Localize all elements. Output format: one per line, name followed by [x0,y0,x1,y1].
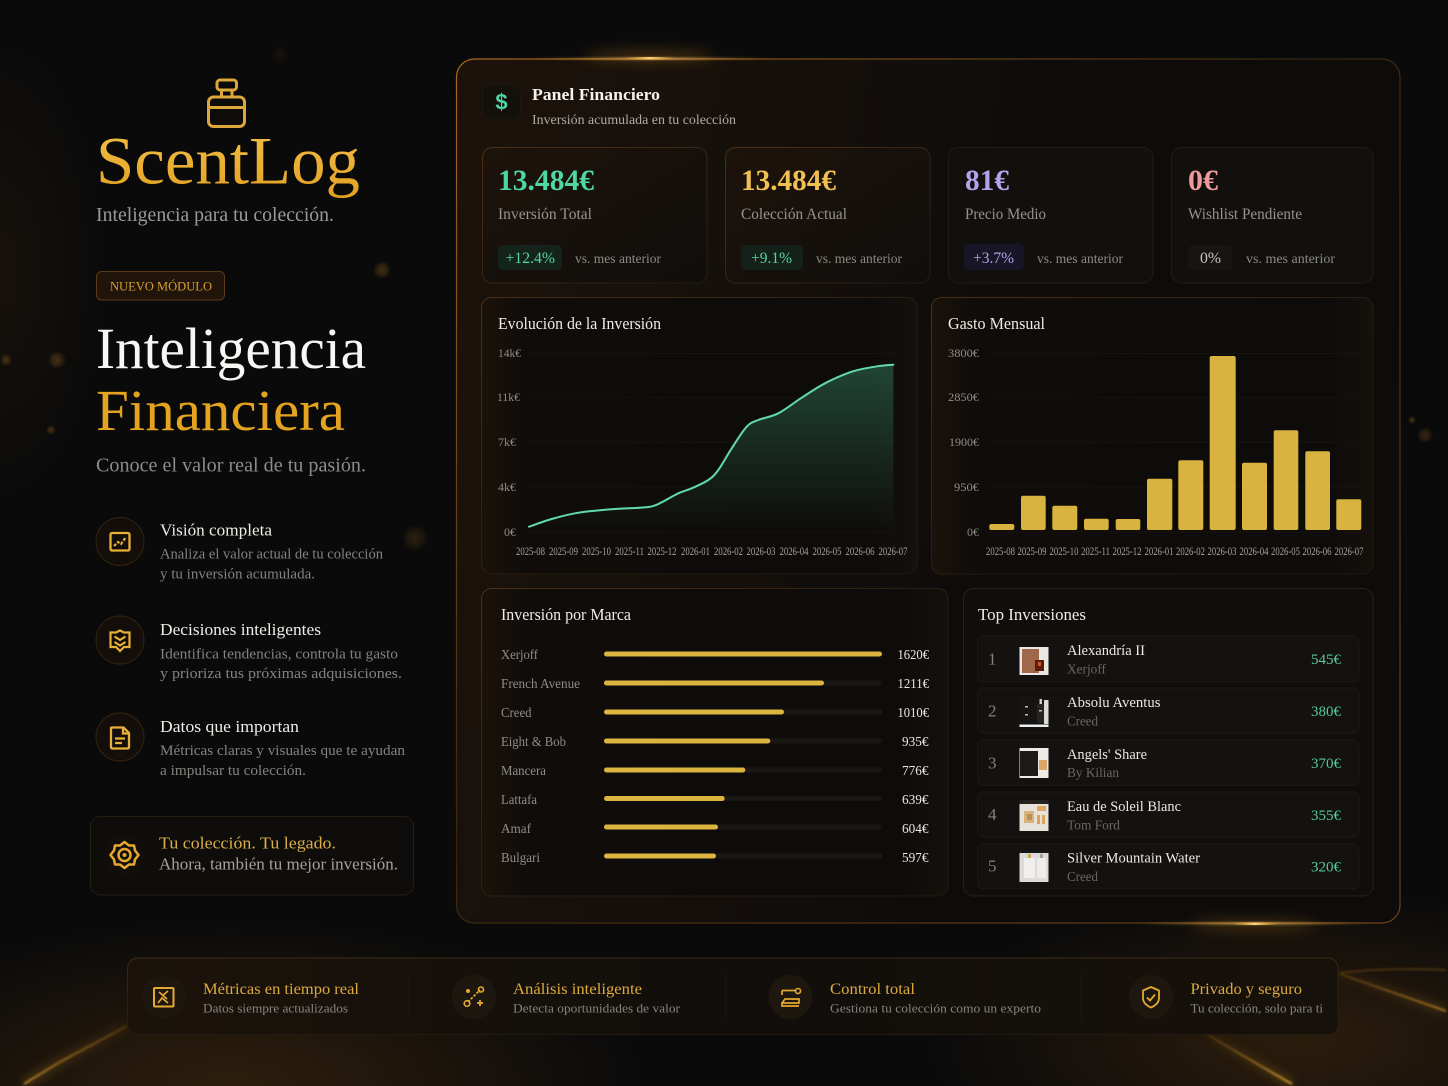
row: Alexandria II: 1 [988,650,996,668]
thumbnail: Angels' Share [1020,745,1048,778]
subheading: Conoce el valor real de tu pasión. [96,454,366,476]
horizontal bar list: 639€ [902,793,928,808]
footer item: control: Control total [830,981,916,998]
icon: metric square [142,976,186,1018]
row: Eau de Soleil Blanc [978,792,1359,838]
row: Alexandria II: 545€ [1311,652,1342,668]
horizontal bar list: 1010€ [898,706,929,721]
row: Angels' Share [978,740,1359,786]
feature: Vision completa: y tu inversión acumulada. [160,567,315,583]
panel: inversion por marca [482,588,948,896]
title: ScentLog: ScentLog [96,122,360,198]
kpi card: wishlist pendiente: 0€ [1188,164,1218,197]
row: Absolu Aventus: 380€ [1311,704,1342,720]
bar chart [948,346,1364,558]
horizontal bar list: Amaf [501,822,531,837]
thumbnail: Silver Mountain Water [1020,850,1048,882]
kpi card: inversion total: Inversión Total [498,206,592,223]
line chart: 14k€ [498,346,521,360]
line chart: 2026-01 [681,546,710,558]
horizontal bar list: 1620€ [898,648,929,663]
row: Alexandria II: Xerjoff [1067,662,1106,676]
footer item: analisis: Análisis inteligente [513,981,642,998]
feature: Decisiones inteligentes: Decisiones inteligentes [160,620,321,639]
row: Absolu Aventus [978,688,1359,734]
line chart: 2025-10 [582,546,611,558]
chart panel: evolucion de la inversion [482,298,917,574]
horizontal bar list: 776€ [902,764,928,779]
thumbnail: Eau de Soleil Blanc [1020,800,1048,831]
kpi card: precio medio [948,148,1153,283]
tagline: Inteligencia para tu colección. [96,205,334,226]
horizontal bar list: Mancera [501,764,547,779]
icon: gear [104,834,146,876]
feature: Decisiones inteligentes [96,616,402,682]
kpi card: inversion total: +12.4% [506,250,555,267]
kpi card: precio medio: vs. mes anterior [1037,251,1123,266]
row: Eau de Soleil Blanc: 355€ [1311,808,1342,824]
bar chart: 2026-05 [1271,546,1300,558]
line chart: 2025-09 [549,546,578,558]
horizontal bar list: Xerjoff [501,648,538,663]
footer item: privado: Privado y seguro [1190,981,1302,998]
horizontal bar list: Eight & Bob [501,735,566,750]
kpi card: coleccion actual: vs. mes anterior [816,251,902,266]
horizontal bar list: Creed [501,706,532,721]
kpi card: wishlist pendiente: Wishlist Pendiente [1188,206,1302,223]
kpi card: wishlist pendiente [1172,148,1373,283]
kpi card: coleccion actual: +9.1% [751,250,792,267]
bar chart: 2026-06 [1302,546,1332,558]
panel header [482,84,736,128]
line chart: 2026-02 [714,546,743,558]
feature: Decisiones inteligentes: y prioriza tus próximas adquisiciones. [160,666,402,682]
bar chart: 2026-07 [1334,546,1364,558]
row: Absolu Aventus: Creed [1067,714,1098,728]
row: Alexandria II: Alexandría II [1067,643,1145,659]
bar chart: 2026-03 [1208,546,1237,558]
icon: dollar [482,84,520,120]
line chart: 2026-07 [878,546,908,558]
bar chart: 3800€ [948,346,979,360]
horizontal bar list: French Avenue [501,677,580,692]
bar chart: 2850€ [948,390,979,404]
line chart: 7k€ [498,435,516,449]
line chart: 2026-04 [780,546,809,558]
feature: Datos que importan [96,713,406,779]
horizontal bar list: Bulgari [501,851,540,866]
feature: Vision completa: Analiza el valor actual de tu colección [160,547,384,563]
panel: panel financiero [456,52,1400,929]
badge: nuevo modulo [96,272,224,300]
footer item: metricas: Métricas en tiempo real [203,981,360,998]
row: Silver Mountain Water: 5 [988,856,996,876]
callout: tu coleccion tu legado: Ahora, también tu mejor inversión. [159,854,398,874]
icon: nodes [452,975,496,1019]
feature: Vision completa: Visión completa [160,520,273,540]
row: Eau de Soleil Blanc: Eau de Soleil Blanc [1067,799,1181,815]
bar chart: 2026-01 [1144,546,1174,558]
bar chart: 2025-09 [1018,546,1047,558]
icon: layered badge [96,616,144,664]
kpi card: precio medio: +3.7% [973,250,1014,267]
kpi card: inversion total: 13.484€ [498,164,594,197]
thumbnail: Alexandria II [1020,644,1048,675]
bar chart: 2026-02 [1176,546,1205,558]
icon: shield [1129,975,1173,1019]
chart panel: evolucion de la inversion: Evolución de la Inversión [498,314,661,333]
panel: inversion por marca: Inversión por Marca [501,605,632,624]
kpi card: inversion total: vs. mes anterior [575,251,661,266]
footer item: control: Gestiona tu colección como un experto [830,1001,1041,1016]
bar chart: 2026-04 [1240,546,1269,558]
row: Absolu Aventus: 2 [988,702,996,720]
row: Angels' Share: Angels' Share [1067,747,1147,763]
horizontal bar list [501,648,929,866]
kpi card: coleccion actual: 13.484€ [741,164,836,197]
icon: control keys [768,975,812,1019]
icon: dollar: $ [495,90,508,114]
row: Silver Mountain Water: Creed [1067,869,1098,884]
panel: top inversiones [964,588,1373,896]
footer bar [128,958,1338,1034]
row: Eau de Soleil Blanc: Tom Ford [1067,818,1120,832]
kpi card: wishlist pendiente: 0% [1200,250,1221,267]
line chart: 2025-11 [615,546,644,558]
footer item: metricas [142,976,360,1018]
feature: Datos que importan: Datos que importan [160,717,299,736]
line chart: 2025-08 [516,546,545,558]
line chart [497,346,908,558]
callout: tu coleccion tu legado [90,816,414,895]
bar chart: 950€ [954,480,979,494]
row: Silver Mountain Water [978,844,1359,889]
row: Angels' Share: 370€ [1311,756,1342,772]
horizontal bar list: 604€ [902,822,928,837]
feature: Datos que importan: Métricas claras y visuales que te ayudan [160,743,406,759]
kpi card: inversion total [482,148,707,283]
feature: Decisiones inteligentes: Identifica tendencias, controla tu gasto [160,647,398,663]
callout: tu coleccion tu legado: Tu colección. Tu legado. [159,834,336,852]
bar chart: 2025-08 [986,546,1015,558]
badge: nuevo modulo: NUEVO MÓDULO [110,280,212,294]
kpi card: precio medio: 81€ [965,164,1009,197]
heading: Inteligencia Financiera: Financiera [96,378,345,443]
line chart: 0€ [504,525,516,539]
chart panel: gasto mensual [932,298,1373,574]
row: Alexandria II [978,636,1359,682]
row: Eau de Soleil Blanc: 4 [988,805,997,824]
line chart: 2026-06 [846,546,875,558]
heading: Inteligencia Financiera [96,316,366,443]
line chart: 2026-03 [746,546,776,558]
horizontal bar list: Lattafa [501,793,538,808]
horizontal bar list: 1211€ [898,677,929,692]
bar chart: 2025-12 [1112,546,1142,558]
icon: chart square [96,518,144,566]
kpi card: precio medio: Precio Medio [965,206,1046,223]
icon: document [96,713,144,761]
line chart: 4k€ [498,480,516,494]
row: Silver Mountain Water: Silver Mountain Water [1067,850,1200,866]
panel header: Panel Financiero [532,85,660,104]
line chart: 2025-12 [648,546,677,558]
kpi card: wishlist pendiente: vs. mes anterior [1246,251,1336,266]
horizontal bar list: 597€ [902,851,928,866]
chart panel: gasto mensual: Gasto Mensual [948,314,1045,333]
row: Angels' Share: 3 [988,754,996,772]
panel header: Inversión acumulada en tu colección [532,113,736,128]
row: Absolu Aventus: Absolu Aventus [1067,695,1161,711]
footer item: metricas: Datos siempre actualizados [203,1001,348,1016]
feature: Vision completa [96,518,384,583]
thumbnail: Absolu Aventus [1020,696,1048,727]
horizontal bar list: 935€ [902,735,928,750]
footer item: control [768,975,1041,1019]
bar chart: 1900€ [949,435,979,449]
footer item: privado [1129,975,1323,1019]
feature: Datos que importan: a impulsar tu colección. [160,763,306,779]
kpi card: coleccion actual [726,148,930,283]
line chart: 2026-05 [812,546,842,558]
bar chart: 0€ [967,525,979,539]
bar chart: 2025-10 [1050,546,1079,558]
heading: Inteligencia Financiera: Inteligencia [96,316,366,381]
brand: logo and tagline [96,80,360,226]
kpi card: coleccion actual: Colección Actual [741,206,847,223]
footer item: analisis: Detecta oportunidades de valor [513,1001,681,1016]
bar chart: 2025-11 [1081,546,1110,558]
footer item: privado: Tu colección, solo para ti [1190,1001,1323,1016]
row: Silver Mountain Water: 320€ [1311,860,1342,876]
line chart: 11k€ [497,390,520,404]
row: Angels' Share: By Kilian [1067,765,1119,780]
panel: top inversiones: Top Inversiones [978,605,1086,624]
footer item: analisis [452,975,681,1019]
icon: perfume bottle [208,80,244,126]
